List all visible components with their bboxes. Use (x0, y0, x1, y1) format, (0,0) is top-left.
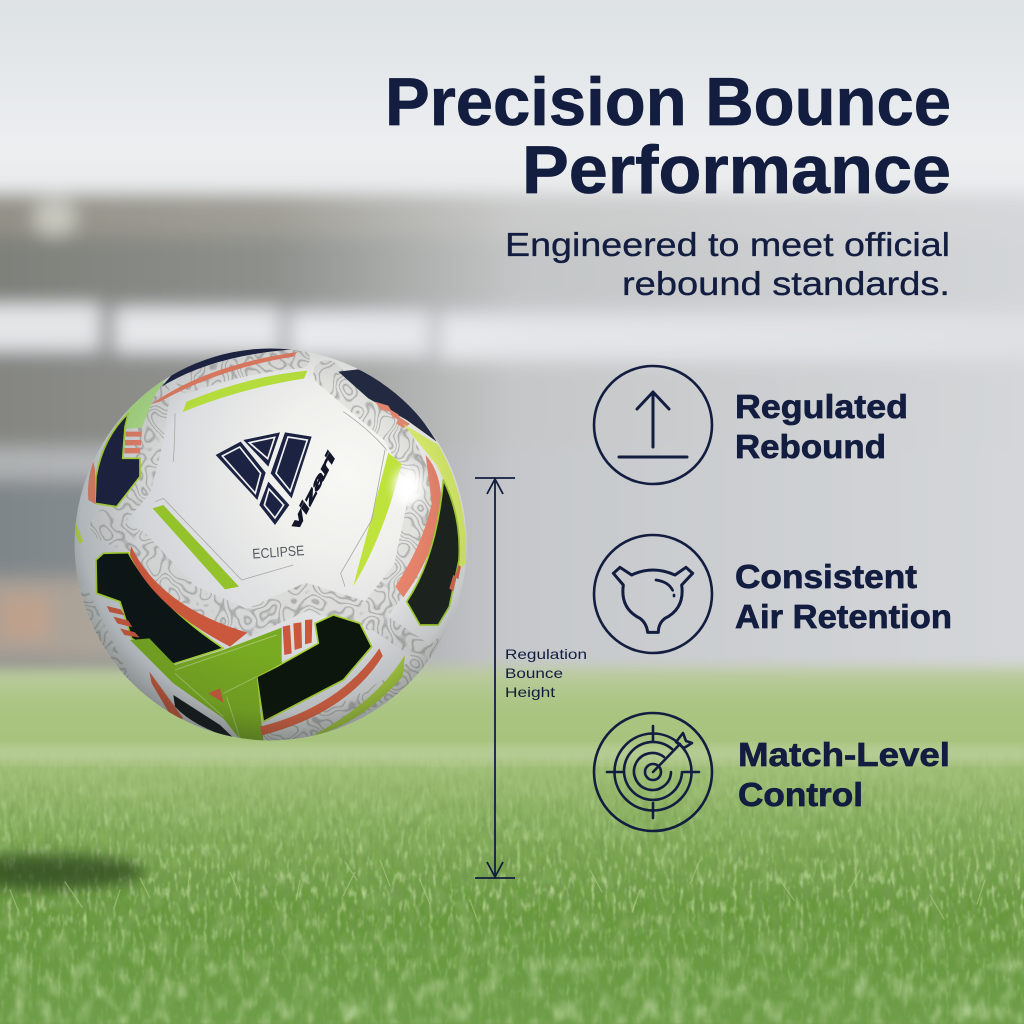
regulation bounce height label (505, 646, 587, 700)
ball: left edge lime accent (75, 523, 83, 544)
ball: big dark panel lower left (96, 553, 223, 664)
feature label: consistent air retention: Consistent (735, 558, 917, 595)
feature label: regulated rebound: Regulated (735, 388, 908, 425)
ball: left lime stripe (153, 505, 239, 589)
ball: central orange stripes (283, 619, 312, 655)
ball: specular highlight (394, 468, 423, 505)
feature label: match-level control: Match-Level (738, 736, 950, 773)
subtitle: rebound standards. (622, 265, 950, 302)
ball: brand wordmark: vizari (287, 450, 339, 531)
ball: right orange band (395, 455, 441, 597)
ball: lower right lime sliver (310, 655, 405, 737)
icon: air bladder (594, 535, 712, 653)
ball: left navy panel (95, 413, 140, 507)
regulation bounce height label: Regulation (505, 646, 587, 662)
title: Precision Bounce (385, 64, 951, 140)
feature label: regulated rebound: Rebound (735, 428, 886, 465)
ball: right lime band (403, 424, 466, 572)
icon: regulated rebound arrow (594, 366, 712, 484)
feature label: consistent air retention: Air Retention (735, 598, 952, 635)
ball: top orange band (152, 352, 297, 404)
ball: bottom dark panel (173, 695, 235, 739)
feature label: regulated rebound (735, 388, 908, 465)
ball: orange band lower left (130, 546, 247, 647)
ball: right lower orange stripes (449, 565, 461, 592)
background: blurred stadium and sky (0, 0, 1024, 685)
ball: lower orange band (260, 648, 383, 735)
regulation bounce height label: Height (505, 684, 555, 700)
title: Performance (522, 132, 951, 208)
icon: target with dart (594, 713, 712, 831)
regulation bounce height label: Bounce (505, 665, 563, 681)
ball: right dark panel (407, 480, 459, 625)
ball: team logo (216, 432, 312, 525)
ball: grey seam texture (80, 350, 439, 740)
ball: upper-left pale green (125, 379, 166, 430)
ball: top-right navy panel (338, 369, 437, 442)
ball: lower-left orange stripes (107, 606, 140, 638)
ball: orange centre triangle (208, 688, 223, 703)
ball: left orange stripes (124, 432, 142, 453)
ball: central lime shapes (130, 628, 282, 741)
ball: left orange edge (88, 462, 95, 504)
ball: small lower orange accent (149, 672, 183, 720)
soccer ball (74, 348, 467, 740)
ball: top lime stripe (183, 371, 307, 412)
ball: lime centre accents (175, 635, 277, 738)
ball: big dark panel lower middle (257, 615, 372, 722)
subtitle: Engineered to meet official (505, 226, 950, 263)
regulation bounce height arrow (475, 478, 515, 878)
feature label: match-level control (738, 736, 950, 813)
ball: right lime stripe (353, 453, 402, 586)
title (385, 64, 951, 208)
subtitle (505, 226, 950, 302)
ball: ECLIPSE model label: ECLIPSE (252, 542, 305, 562)
feature label: match-level control: Control (738, 776, 863, 813)
feature label: consistent air retention (735, 558, 952, 635)
ball: top navy panel (162, 348, 292, 386)
ball: top-right orange stripes (375, 402, 410, 428)
background: grass field (0, 668, 1024, 1024)
